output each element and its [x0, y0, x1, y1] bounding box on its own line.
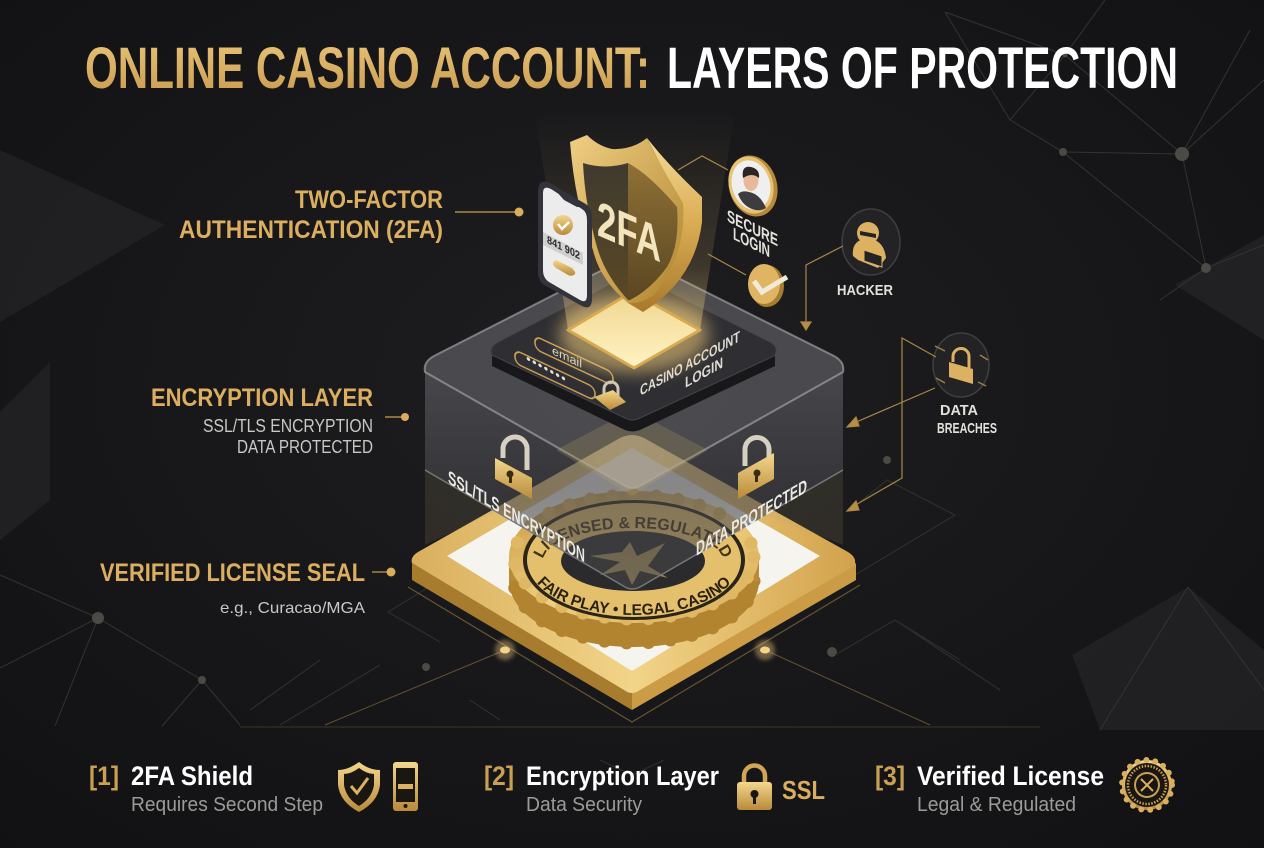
padlock small [594, 382, 626, 410]
legend 1: 2fa shield: [1] [89, 761, 119, 791]
legend 2: encryption layer: Encryption Layer [526, 761, 719, 791]
callout: two-factor authentication [179, 186, 524, 244]
connector lines [678, 156, 746, 275]
secure login label: SECURE [727, 206, 778, 250]
legend 3: verified license: [3] [875, 761, 905, 791]
seal: fair play legal casino [508, 488, 760, 650]
legend 1: 2fa shield [89, 761, 418, 816]
seal: fair play legal casino: FAIR PLAY • LEGAL CASINO [538, 576, 729, 615]
2FA shield [570, 135, 702, 312]
login label: LOGIN [685, 354, 723, 392]
callout: encryption layer: DATA PROTECTED [237, 437, 373, 457]
lock right [738, 437, 774, 499]
login label: CASINO ACCOUNT [640, 328, 740, 400]
hacker icon [842, 209, 900, 275]
callout: encryption layer [151, 384, 409, 457]
data breaches label [937, 402, 997, 437]
login label [640, 328, 740, 400]
legend 1: 2fa shield: 2FA Shield [131, 761, 253, 791]
2FA shield: 2FA [597, 191, 661, 274]
callout: verified license seal: e.g., Curacao/MGA [220, 600, 365, 617]
callout: two-factor authentication: AUTHENTICATION (2FA) [179, 216, 443, 244]
band text: ssl tls encryption: SSL/TLS ENCRYPTION [448, 466, 585, 567]
callout: two-factor authentication: TWO-FACTOR [295, 186, 443, 214]
legend 2: encryption layer: [2] [484, 761, 514, 791]
glass encryption layer [425, 258, 843, 589]
data breaches arrows [847, 338, 936, 511]
glow pad [559, 292, 709, 373]
band text: data protected: DATA PROTECTED [696, 475, 807, 561]
callout: encryption layer: SSL/TLS ENCRYPTION [203, 416, 373, 436]
casino account login platform [491, 276, 776, 432]
callout: verified license seal [100, 559, 396, 617]
title: ONLINE CASINO ACCOUNT: [85, 36, 650, 101]
hacker arrow [801, 246, 843, 330]
password field: ●●●●●●● [526, 353, 567, 384]
lock left [495, 437, 532, 499]
email field: email [552, 344, 582, 371]
icon: padlock [737, 766, 772, 810]
secure login label: LOGIN [733, 224, 770, 261]
data breaches label: BREACHES [937, 420, 997, 437]
email field [535, 336, 613, 386]
data breaches label: DATA [940, 402, 978, 419]
base nodes [495, 640, 775, 660]
icon: seal [1122, 760, 1172, 810]
seal: fair play legal casino: LICENSED & REGULATED [533, 516, 731, 558]
glowing beam [535, 112, 735, 368]
phone with code [538, 182, 592, 307]
legend 2: encryption layer: Data Security [526, 794, 642, 816]
callout: verified license seal: VERIFIED LICENSE SEAL [100, 559, 365, 587]
icon: shield [338, 762, 380, 812]
hacker label: HACKER [837, 282, 893, 299]
legend 3: verified license: Verified License [917, 761, 1104, 791]
legend 1: 2fa shield: Requires Second Step [131, 794, 323, 816]
icon: phone [393, 762, 418, 811]
secure login icon [721, 150, 785, 222]
legend 2: encryption layer [484, 761, 825, 816]
legend 3: verified license [875, 760, 1172, 816]
callout: encryption layer: ENCRYPTION LAYER [151, 384, 373, 412]
gold license base [412, 435, 856, 710]
legend 3: verified license: Legal & Regulated [917, 794, 1076, 816]
password field [515, 350, 595, 401]
check coin icon [748, 264, 787, 307]
phone with code: 841 902 [547, 234, 580, 263]
ssl label: SSL [782, 775, 825, 805]
data breaches icon [933, 333, 989, 397]
